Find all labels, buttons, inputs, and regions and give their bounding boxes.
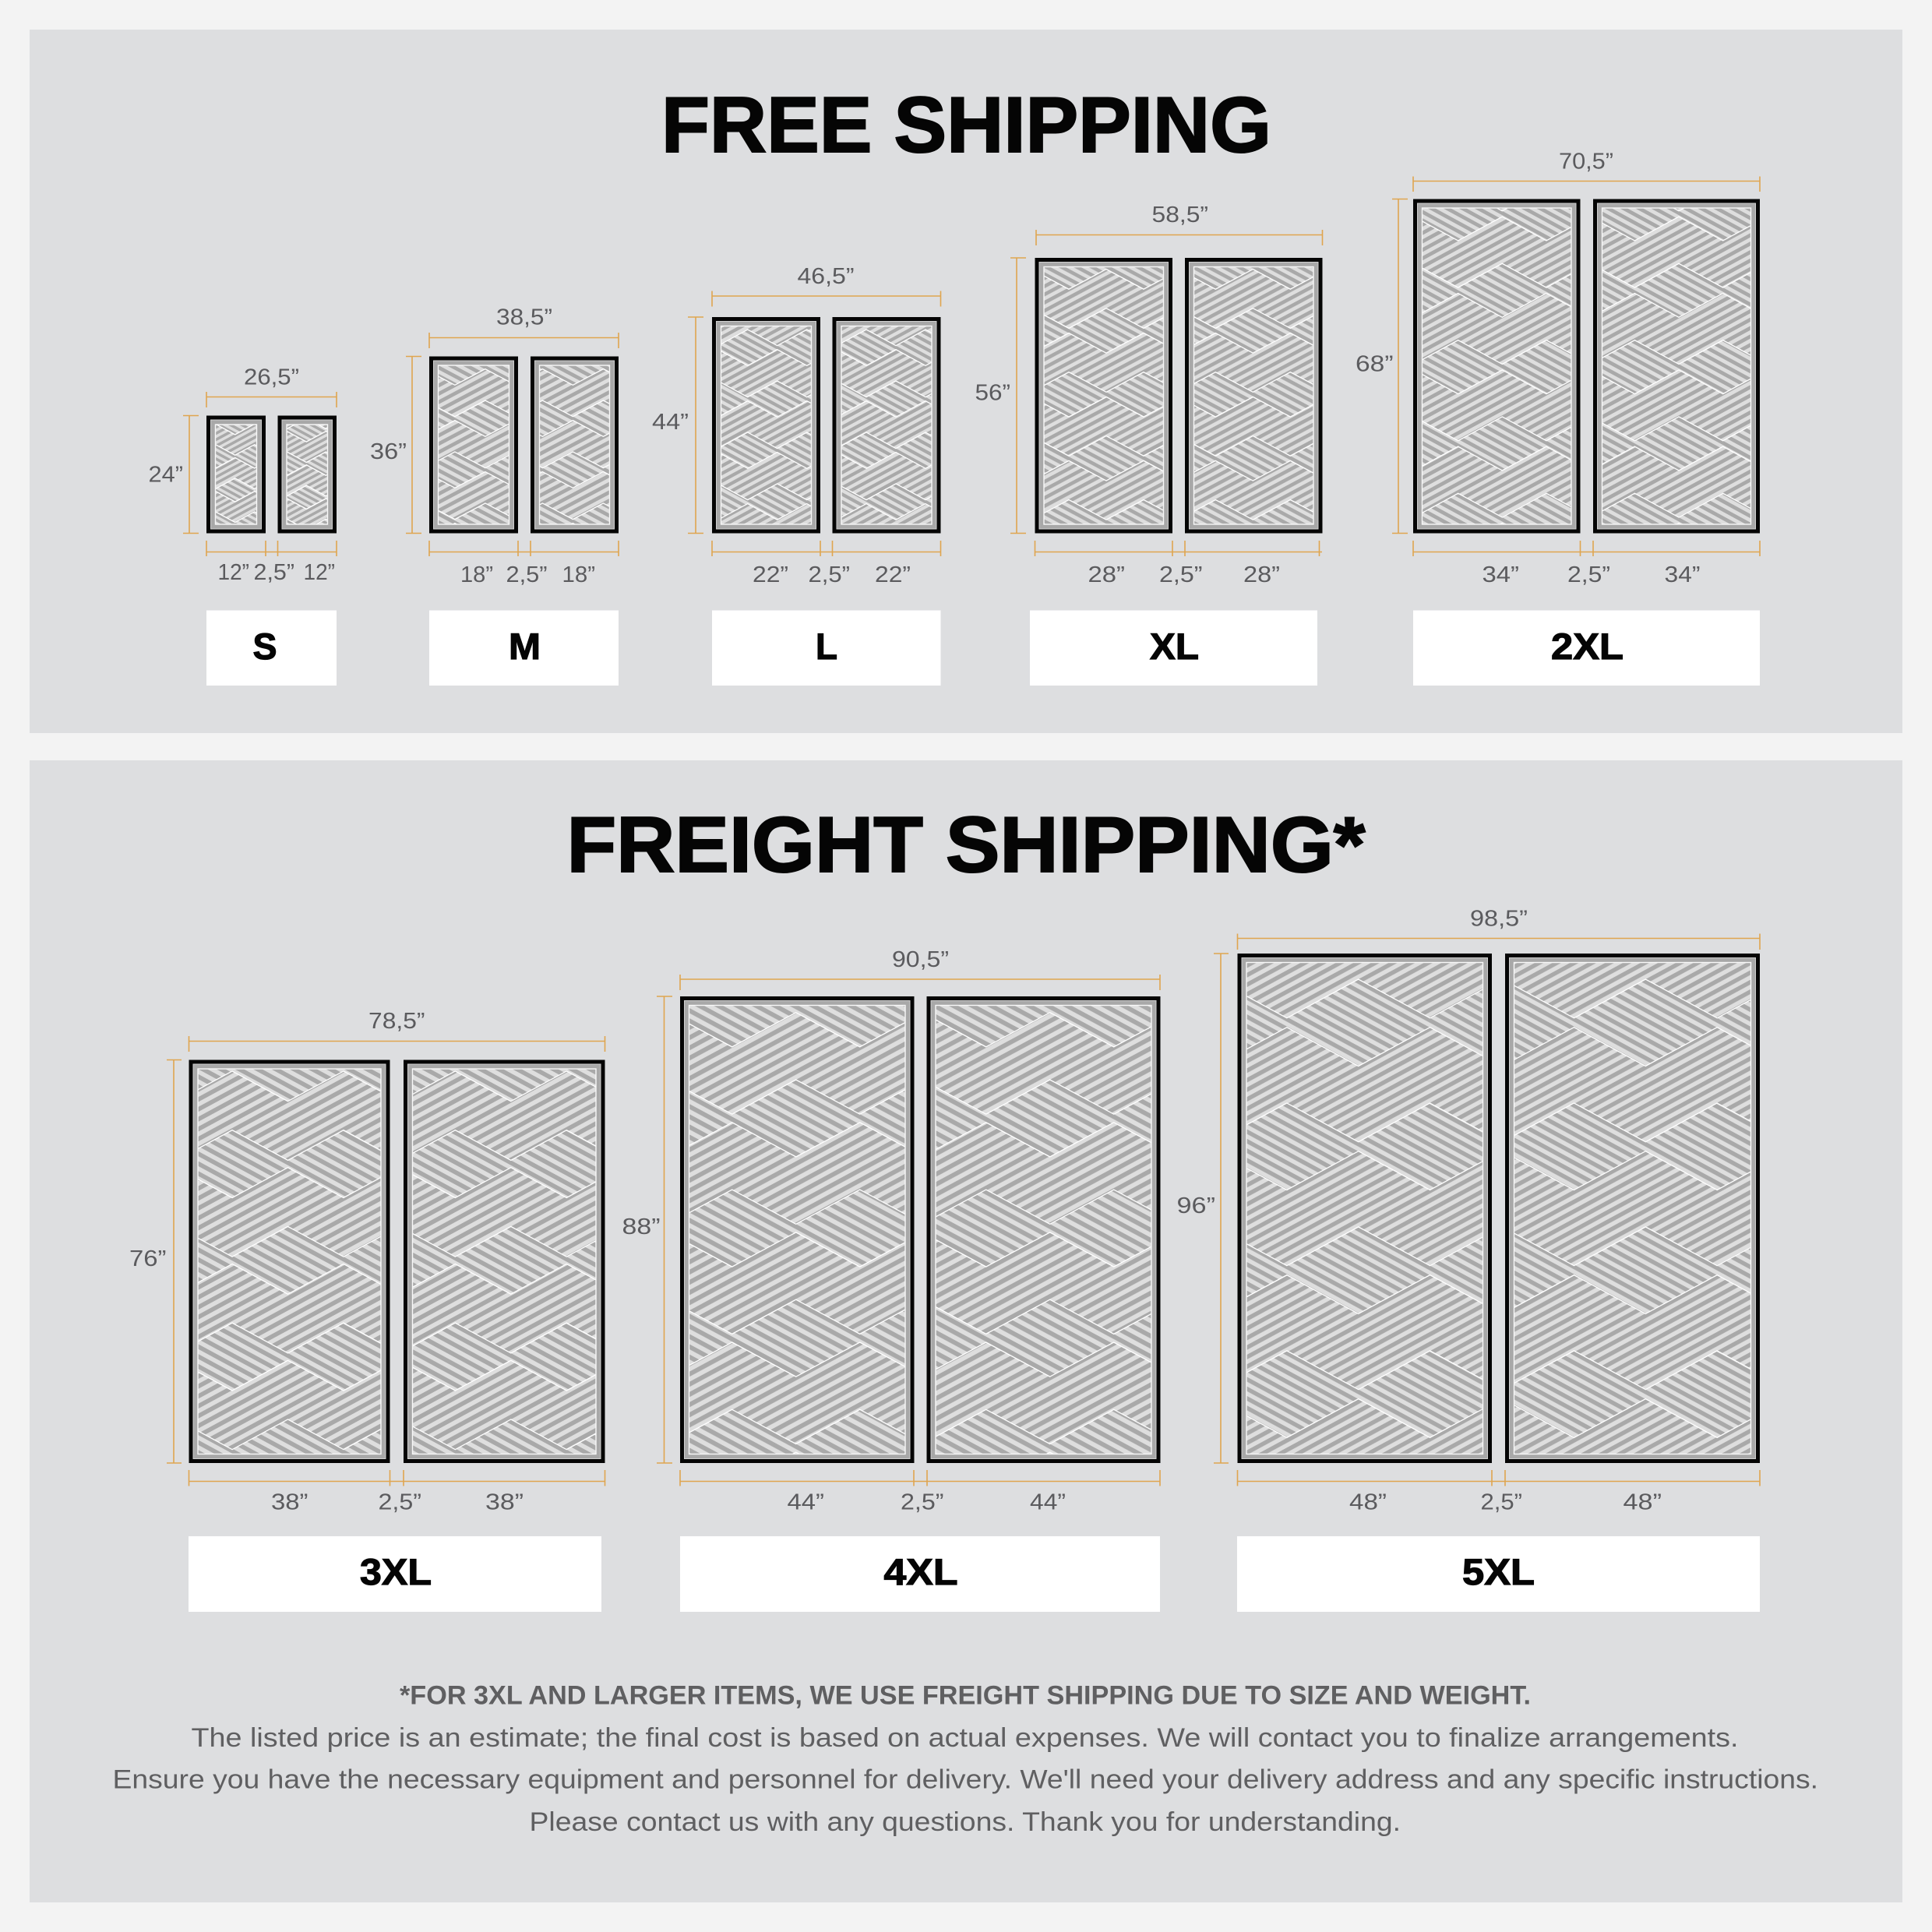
dimension labels 3XL: 2,5” <box>379 1490 421 1514</box>
dimension labels 4XL: 90,5” <box>892 947 949 972</box>
dimension lines L <box>688 291 941 556</box>
panel: free shipping <box>30 0 1932 733</box>
rug M left <box>303 221 728 698</box>
rug 5XL left <box>929 548 1930 1697</box>
size tag 5XL <box>1237 1536 1760 1612</box>
dimension labels S: 24” <box>148 463 183 488</box>
size tag L: L <box>816 626 837 667</box>
heading: free shipping: FREE SHIPPING <box>661 82 1271 169</box>
rug S left <box>99 328 372 640</box>
size M diagram <box>303 221 785 698</box>
rug L left <box>600 203 1014 679</box>
size S diagram <box>99 328 442 686</box>
dimension labels 5XL: 98,5” <box>1470 907 1528 932</box>
dimension lines 2XL <box>1392 176 1760 556</box>
dimension labels S: 26,5” <box>244 365 299 390</box>
dimension labels 2XL: 2,5” <box>1567 562 1610 587</box>
heading: freight shipping: FREIGHT SHIPPING* <box>567 802 1366 889</box>
dimension labels 3XL: 76” <box>129 1246 167 1271</box>
dimension lines 3XL <box>167 1036 605 1486</box>
dimension labels M <box>370 305 595 587</box>
freight shipping note: Please contact us with any questions. Thank you for understanding. <box>530 1807 1401 1837</box>
size tag 2XL: 2XL <box>1551 626 1624 667</box>
dimension labels 3XL: 38” <box>485 1490 524 1514</box>
dimension labels XL: 56” <box>975 380 1010 405</box>
dimension labels 3XL <box>129 1009 524 1514</box>
dimension labels S <box>148 365 335 585</box>
rug 2XL left <box>1237 0 1856 707</box>
dimension lines XL <box>1010 230 1323 556</box>
dimension labels L: 2,5” <box>809 562 850 587</box>
freight shipping note: Ensure you have the necessary equipment and personnel for delivery. We'll need your delivery address and any specific instructions. <box>112 1765 1818 1795</box>
freight shipping note <box>112 1681 1818 1837</box>
dimension labels 5XL: 48” <box>1624 1490 1662 1514</box>
size tag S <box>206 611 337 686</box>
dimension labels S: 2,5” <box>254 560 294 585</box>
dimension labels 5XL: 48” <box>1349 1490 1387 1514</box>
rug 4XL right <box>667 697 1561 1717</box>
dimension labels S: 12” <box>304 560 335 585</box>
dimension labels M: 18” <box>460 562 493 587</box>
size L diagram <box>600 203 1133 686</box>
size 5XL diagram <box>929 548 1932 1697</box>
rug M right <box>360 221 785 698</box>
dimension labels M: 18” <box>562 562 595 587</box>
rug XL right <box>1028 86 1552 679</box>
dimension labels XL <box>975 203 1280 587</box>
rug 4XL left <box>413 697 1307 1717</box>
dimension labels 4XL <box>622 947 1066 1514</box>
dimension labels 5XL: 2,5” <box>1480 1490 1522 1514</box>
size tag L <box>712 611 941 686</box>
dimension labels 2XL: 34” <box>1664 562 1700 587</box>
dimension labels L: 44” <box>652 410 689 435</box>
size tag 4XL: 4XL <box>883 1551 958 1592</box>
rug 5XL right <box>1216 548 1932 1697</box>
dimension labels 3XL: 38” <box>271 1490 308 1514</box>
dimension labels L: 22” <box>753 562 788 587</box>
size tag XL: XL <box>1150 626 1199 667</box>
rug 3XL left <box>0 891 733 1786</box>
freight shipping note: *FOR 3XL AND LARGER ITEMS, WE USE FREIGHT SHIPPING DUE TO SIZE AND WEIGHT. <box>400 1681 1531 1711</box>
dimension labels 2XL: 70,5” <box>1559 150 1613 175</box>
dimension labels S: 12” <box>218 560 249 585</box>
dimension labels 2XL <box>1356 150 1700 587</box>
dimension labels 2XL: 68” <box>1356 352 1393 377</box>
dimension labels L <box>652 264 911 587</box>
size tag 5XL: 5XL <box>1462 1551 1535 1592</box>
size tag 4XL <box>680 1536 1160 1612</box>
rug 2XL right <box>1414 0 1932 707</box>
dimension labels XL: 58,5” <box>1151 203 1208 227</box>
size 3XL diagram <box>0 891 956 1786</box>
dimension lines M <box>406 333 619 556</box>
rug 3XL right <box>177 891 956 1786</box>
panel: freight shipping <box>0 548 1932 1902</box>
rug L right <box>718 203 1133 679</box>
rug XL left <box>882 86 1405 679</box>
dimension labels 4XL: 44” <box>787 1490 824 1514</box>
dimension labels 5XL: 96” <box>1176 1193 1215 1218</box>
size tag 3XL: 3XL <box>360 1551 432 1592</box>
size tag S: S <box>252 626 277 667</box>
freight shipping note: The listed price is an estimate; the final cost is based on actual expenses. We will contact you to finalize arrangements. <box>192 1723 1739 1753</box>
dimension lines 4XL <box>657 975 1160 1486</box>
dimension lines 5XL <box>1214 933 1760 1486</box>
size tag M <box>429 611 619 686</box>
dimension labels 5XL <box>1176 907 1662 1514</box>
rug S right <box>170 335 442 647</box>
dimension labels M: 38,5” <box>496 305 552 330</box>
dimension labels L: 46,5” <box>798 264 854 289</box>
dimension labels XL: 28” <box>1088 562 1125 587</box>
size tag 2XL <box>1413 611 1760 686</box>
size XL diagram <box>882 86 1552 686</box>
size tag M: M <box>509 626 541 667</box>
dimension labels 2XL: 34” <box>1482 562 1519 587</box>
size tag 3XL <box>189 1536 601 1612</box>
dimension labels XL: 28” <box>1243 562 1280 587</box>
size 4XL diagram <box>413 697 1561 1717</box>
size 2XL diagram <box>1237 0 1932 707</box>
dimension labels L: 22” <box>875 562 911 587</box>
dimension labels 4XL: 44” <box>1030 1490 1066 1514</box>
dimension lines S <box>183 392 337 556</box>
size tag XL <box>1030 611 1317 686</box>
dimension labels M: 36” <box>370 439 407 464</box>
dimension labels 4XL: 88” <box>622 1215 661 1239</box>
dimension labels M: 2,5” <box>506 562 547 587</box>
dimension labels 3XL: 78,5” <box>368 1009 425 1034</box>
dimension labels XL: 2,5” <box>1159 562 1203 587</box>
dimension labels 4XL: 2,5” <box>901 1490 944 1514</box>
